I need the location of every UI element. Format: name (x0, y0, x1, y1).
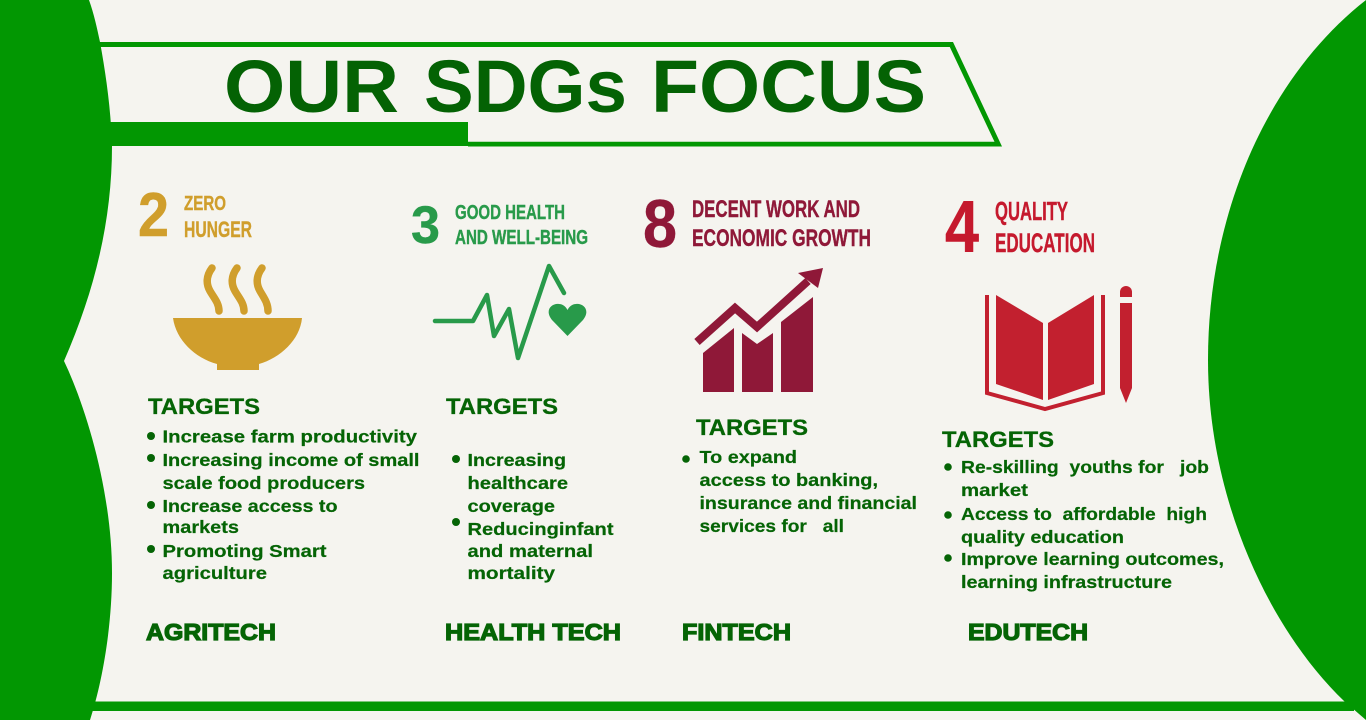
SDG 8 heading (643, 186, 871, 262)
target list: agriculture (162, 563, 267, 583)
title: FOCUS (651, 45, 926, 128)
target list: Improve learning outcomes, (961, 549, 1224, 569)
panel: edutech (942, 187, 1224, 645)
targets heading: TARGETS (148, 394, 260, 419)
sector label: EDUTECH (968, 619, 1088, 645)
target list: services for all (700, 516, 844, 536)
SDG 4 heading: EDUCATION (995, 228, 1095, 258)
target list: access to banking, (700, 470, 878, 490)
SDG 3 heading: AND WELL-BEING (455, 227, 588, 249)
right green curved shape (1208, 0, 1366, 720)
bottom green band (92, 702, 1354, 711)
target list: and maternal (468, 541, 593, 561)
target list (147, 426, 420, 583)
icon: growth chart with arrow (697, 268, 823, 392)
sector label: FINTECH (682, 619, 791, 645)
targets heading: TARGETS (446, 394, 558, 419)
target list: Increase farm productivity (162, 426, 417, 446)
SDG 2 heading: 2 (138, 181, 169, 250)
SDG 3 heading (411, 196, 588, 255)
target list: healthcare (468, 473, 568, 493)
SDG 4 heading: QUALITY (995, 196, 1068, 226)
title banner (100, 42, 1002, 146)
target list (682, 447, 917, 536)
SDG 4 heading (945, 187, 1095, 268)
target list (944, 457, 1224, 592)
target list: To expand (700, 447, 797, 467)
icon: soup bowl (173, 268, 302, 370)
target list: Re-skilling youths for job (961, 457, 1209, 477)
sector label: AGRITECH (146, 619, 276, 645)
target list: Increasing (468, 450, 566, 470)
SDG 2 heading: ZERO (184, 193, 226, 215)
panel: agritech (138, 181, 420, 645)
icon: open book and pencil (987, 286, 1132, 409)
targets heading: TARGETS (942, 427, 1054, 452)
left green curved shape (0, 0, 112, 720)
target list: insurance and financial (700, 493, 917, 513)
SDG 2 heading: HUNGER (184, 217, 252, 242)
SDG 8 heading: 8 (643, 186, 677, 262)
SDG 4 heading: 4 (945, 187, 979, 268)
SDG 3 heading: 3 (411, 196, 440, 255)
target list: scale food producers (162, 473, 365, 493)
target list: coverage (468, 496, 555, 516)
title: SDGs (424, 45, 627, 128)
panel: health tech (411, 196, 621, 645)
target list: mortality (468, 563, 555, 583)
target list: Access to affordable high (961, 504, 1207, 524)
SDG 2 heading (138, 181, 252, 250)
title (224, 45, 926, 128)
icon: heartbeat and heart (435, 266, 586, 358)
panel: fintech (643, 186, 917, 645)
SDG 8 heading: ECONOMIC GROWTH (692, 225, 871, 252)
target list: Increase access to (162, 496, 338, 516)
target list: Increasing income of small (162, 450, 420, 470)
sector label: HEALTH TECH (445, 619, 621, 645)
target list (452, 450, 614, 583)
target list: markets (162, 517, 239, 537)
target list: quality education (961, 527, 1124, 547)
target list: Promoting Smart (162, 541, 327, 561)
target list: Reducinginfant (468, 519, 614, 539)
target list: learning infrastructure (961, 572, 1172, 592)
SDG 3 heading: GOOD HEALTH (455, 202, 565, 224)
target list: market (961, 480, 1028, 500)
SDG 8 heading: DECENT WORK AND (692, 196, 860, 223)
title: OUR (224, 45, 399, 128)
targets heading: TARGETS (696, 415, 808, 440)
